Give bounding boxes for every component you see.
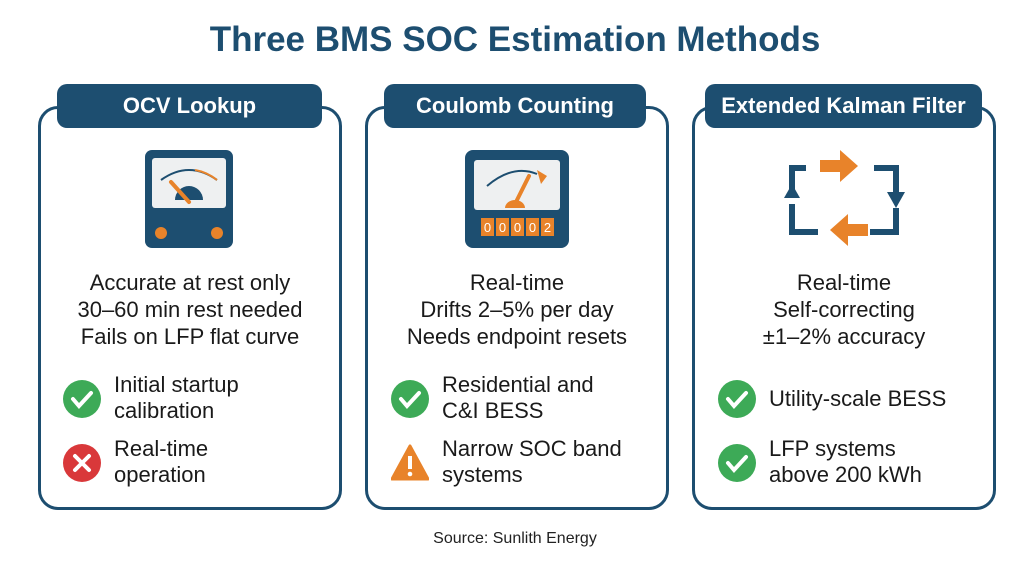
text: EKF characteristics: ±1–2% accuracy (763, 324, 925, 349)
panel: Coulomb counting (365, 106, 669, 510)
icon: counter meter: 0 (484, 220, 491, 235)
text: OCV characteristics: 30–60 min rest needed (77, 297, 303, 322)
icon: counter meter: 0 (529, 220, 536, 235)
icon: counter meter: 0 (514, 220, 521, 235)
item: cross real-time: Real-time (114, 436, 208, 461)
text: EKF characteristics (763, 270, 926, 349)
item: check LFP systems (718, 436, 922, 487)
panel: Extended Kalman Filter (692, 106, 996, 510)
icon: counter meter (465, 150, 569, 248)
tab: Coulomb Counting (384, 84, 646, 128)
title: Three BMS SOC Estimation Methods (210, 20, 820, 59)
source note: Source: Sunlith Energy (433, 530, 597, 547)
icon: cycle arrows (784, 150, 905, 246)
item: check residential: C&I BESS (442, 398, 543, 423)
text: Coulomb characteristics: Drifts 2–5% per day (420, 297, 614, 322)
text: EKF characteristics: Real-time (797, 270, 891, 295)
item: cross real-time: operation (114, 462, 206, 487)
tab: OCV Lookup: OCV Lookup (123, 93, 256, 118)
item: warning narrow SOC (391, 436, 622, 487)
tab: Coulomb Counting: Coulomb Counting (416, 93, 614, 118)
icon: counter meter: 0 (499, 220, 506, 235)
item: check LFP systems: above 200 kWh (769, 462, 922, 487)
text: OCV characteristics (77, 270, 303, 349)
text: Coulomb characteristics: Real-time (470, 270, 564, 295)
item: check startup calibration: calibration (114, 398, 214, 423)
item: check startup calibration: Initial startup (114, 372, 239, 397)
text: OCV characteristics: Accurate at rest only (90, 270, 290, 295)
item: check residential: Residential and (442, 372, 594, 397)
text: OCV characteristics: Fails on LFP flat curve (81, 324, 299, 349)
item: check startup calibration (63, 372, 239, 423)
text: Coulomb characteristics (407, 270, 627, 349)
item: warning narrow SOC: Narrow SOC band (442, 436, 622, 461)
item: warning narrow SOC: systems (442, 462, 523, 487)
tab: OCV Lookup (57, 84, 322, 128)
item: check utility-scale (718, 380, 946, 418)
item: cross real-time (63, 436, 208, 487)
tab: Extended Kalman Filter (705, 84, 982, 128)
panel: OCV lookup (38, 106, 342, 510)
text: Coulomb characteristics: Needs endpoint resets (407, 324, 627, 349)
icon: analog meter (145, 150, 233, 248)
text: EKF characteristics: Self-correcting (773, 297, 915, 322)
tab: Extended Kalman Filter: Extended Kalman Filter (721, 93, 966, 118)
icon: counter meter: 2 (544, 220, 551, 235)
item: check LFP systems: LFP systems (769, 436, 896, 461)
item: check utility-scale: Utility-scale BESS (769, 386, 946, 411)
item: check residential (391, 372, 594, 423)
